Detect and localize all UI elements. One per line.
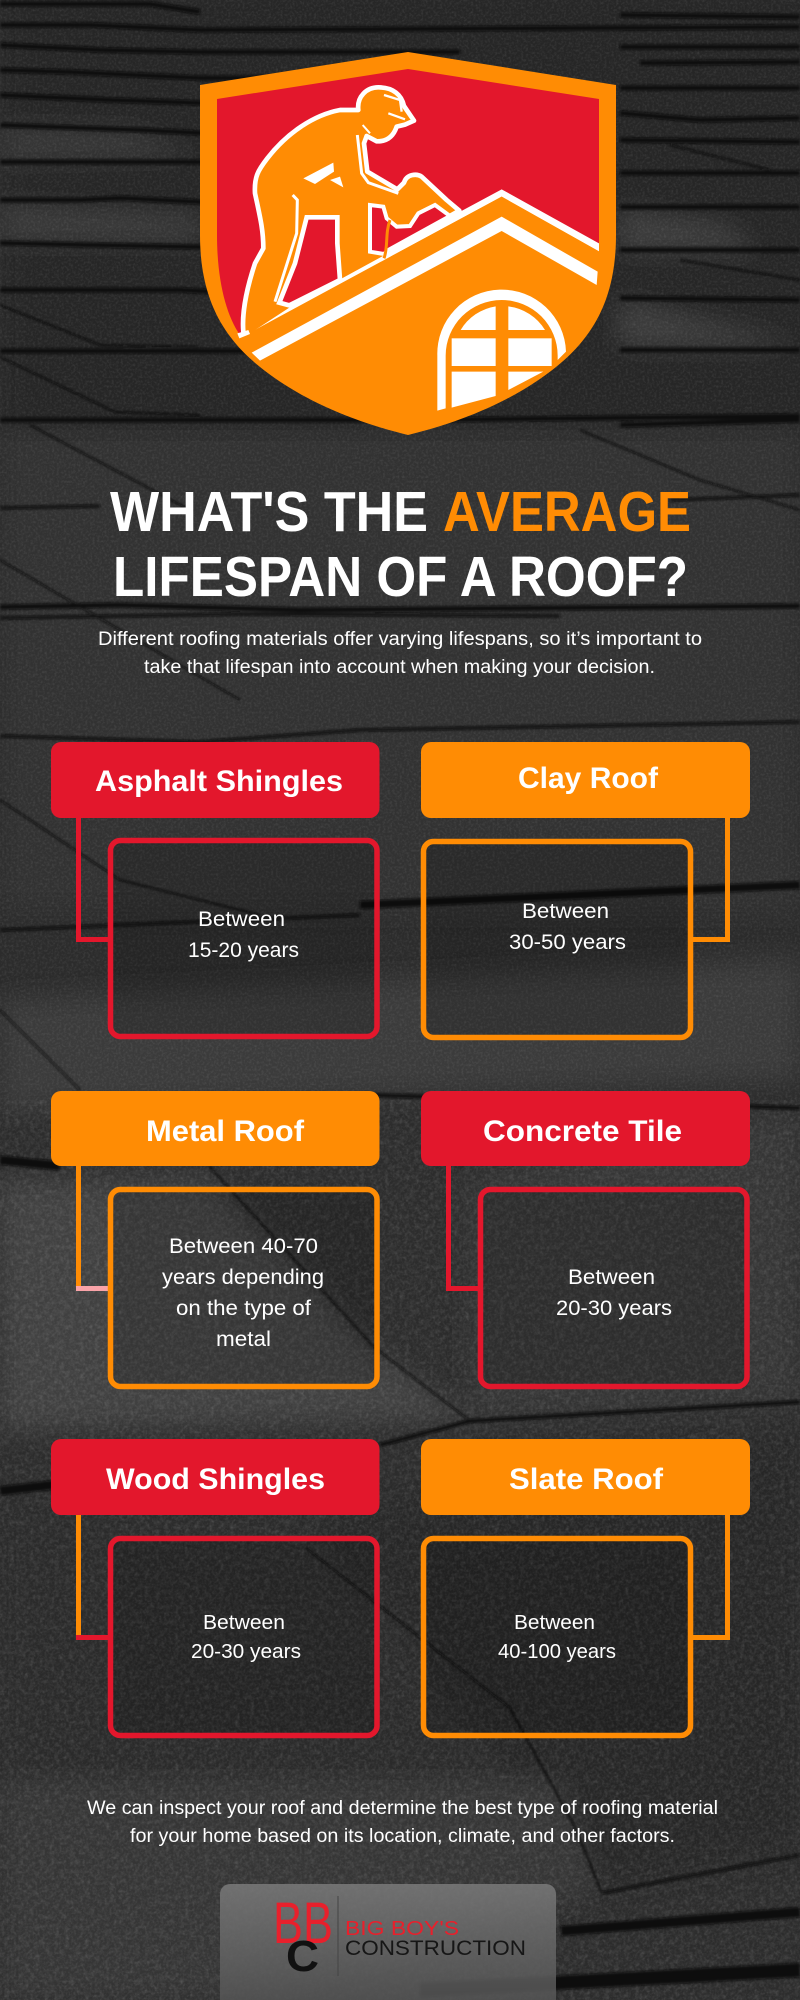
header label: Clay Roof <box>518 762 658 795</box>
roof lower white band <box>252 217 598 361</box>
connector <box>78 815 110 940</box>
shirt highlights <box>303 163 334 184</box>
lifespan: metal <box>216 1327 271 1351</box>
arched window <box>437 290 566 411</box>
card: clay roof <box>421 742 750 1038</box>
intro paragraph: Different roofing materials offer varying lifespans, so it’s important to <box>98 629 702 650</box>
lifespan: 40-100 years <box>498 1640 616 1663</box>
body box <box>110 1190 377 1386</box>
BBC monogram: C <box>286 1932 319 1981</box>
nail gun cord <box>384 220 390 258</box>
boot tip <box>237 330 250 338</box>
lifespan: Between <box>514 1611 595 1634</box>
body box <box>424 842 690 1038</box>
intro paragraph <box>98 629 702 678</box>
wordmark <box>345 1918 526 1960</box>
lifespan: on the type of <box>176 1296 311 1320</box>
gap between arm and leg <box>370 205 450 254</box>
intro paragraph: take that lifespan into account when making your decision. <box>144 657 655 678</box>
translucent panel <box>220 1884 556 2000</box>
logo panel: Big Boy's Construction <box>220 1884 556 2000</box>
connector <box>691 815 728 940</box>
wordmark: BIG BOY'S <box>345 1918 459 1940</box>
title: LIFESPAN OF A ROOF? <box>113 545 688 609</box>
divider <box>338 1896 339 1976</box>
closing paragraph <box>87 1798 718 1847</box>
shield red field <box>217 69 599 335</box>
body box <box>110 1538 377 1736</box>
header <box>421 1439 750 1515</box>
connector red foot <box>76 1635 110 1640</box>
header <box>51 742 380 818</box>
gap between legs <box>279 217 340 305</box>
card: asphalt shingles <box>51 742 380 1036</box>
body box <box>110 840 377 1036</box>
shield outer orange <box>200 52 616 435</box>
BBC monogram: BB <box>273 1891 333 1956</box>
header <box>51 1439 380 1515</box>
lifespan <box>498 1611 616 1663</box>
lifespan: Between 40-70 <box>169 1234 318 1258</box>
closing paragraph: for your home based on its location, climate, and other factors. <box>130 1826 675 1847</box>
logo shield: roofer on a roof <box>200 52 616 435</box>
lifespan <box>191 1611 301 1663</box>
card: concrete tile <box>421 1091 750 1386</box>
lifespan <box>509 899 626 954</box>
header label: Metal Roof <box>146 1115 304 1148</box>
BBC monogram <box>273 1891 333 1981</box>
lifespan: Between <box>198 907 285 931</box>
header label: Asphalt Shingles <box>95 765 343 798</box>
connector <box>448 1164 480 1288</box>
lifespan: Between <box>568 1265 655 1289</box>
lifespan <box>162 1234 324 1351</box>
body box <box>424 1538 690 1736</box>
header label: Slate Roof <box>509 1463 663 1496</box>
header <box>421 742 750 818</box>
lifespan <box>188 907 299 962</box>
lifespan: 20-30 years <box>556 1296 672 1320</box>
card: slate roof <box>421 1439 750 1736</box>
lifespan: 20-30 years <box>191 1640 301 1663</box>
header label: Wood Shingles <box>106 1463 325 1496</box>
card: metal roof <box>51 1091 380 1386</box>
connector <box>691 1513 728 1638</box>
connector pink foot <box>76 1286 110 1291</box>
connector <box>76 1511 81 1638</box>
card: wood shingles <box>51 1439 380 1736</box>
lifespan: Between <box>522 899 609 923</box>
header label: Concrete Tile <box>483 1115 682 1148</box>
illustration drawn in crop coordinates <box>237 87 599 411</box>
lifespan <box>556 1265 672 1320</box>
wordmark: CONSTRUCTION <box>345 1936 526 1960</box>
title: AVERAGE <box>443 480 691 544</box>
closing paragraph: We can inspect your roof and determine the best type of roofing material <box>87 1798 718 1819</box>
roofer figure <box>243 87 459 338</box>
lifespan: 15-20 years <box>188 938 299 962</box>
lifespan: Between <box>203 1611 285 1634</box>
lifespan: years depending <box>162 1265 324 1289</box>
hard hat details <box>384 95 405 119</box>
connector <box>76 1164 81 1288</box>
title <box>110 480 691 609</box>
title: WHAT'S THE <box>110 480 428 544</box>
orange roof band <box>239 197 599 358</box>
header <box>51 1091 380 1166</box>
body box <box>480 1190 747 1386</box>
roof upper white edge <box>384 189 599 259</box>
header <box>421 1091 750 1166</box>
lifespan: 30-50 years <box>509 930 626 954</box>
